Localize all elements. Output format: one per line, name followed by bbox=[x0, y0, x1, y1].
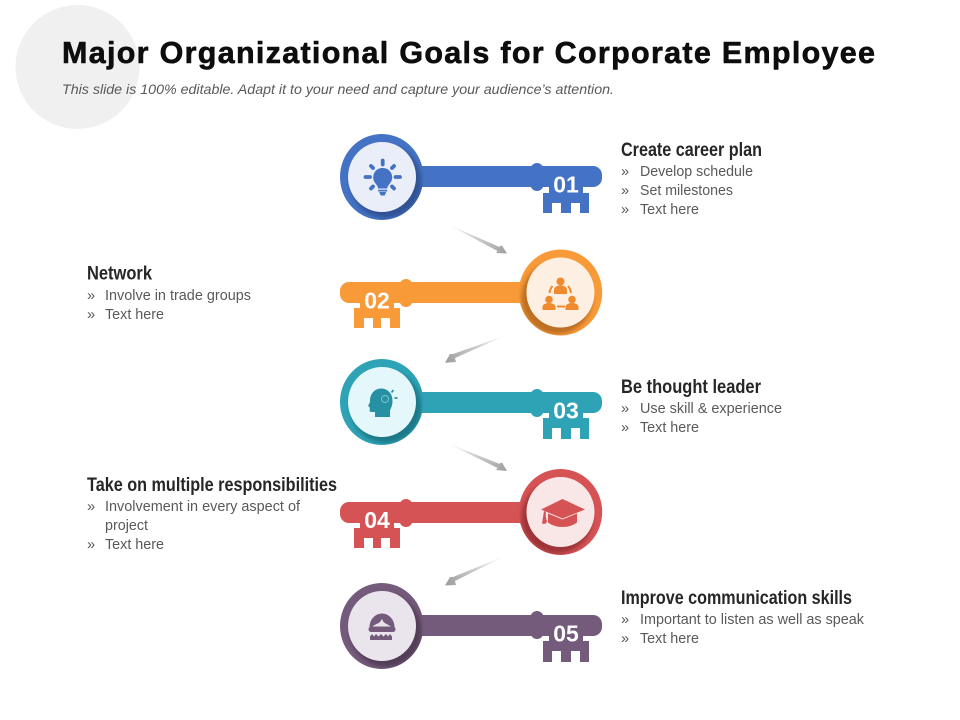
icon: people network bbox=[542, 278, 578, 310]
text block: be thought leader bbox=[621, 377, 782, 436]
icon: team under dome bbox=[368, 614, 396, 640]
title: Major Organizational Goals for Corporate Employee bbox=[62, 36, 875, 70]
icon: graduation cap bbox=[541, 499, 585, 527]
text block: create career plan: » bbox=[621, 202, 629, 218]
text block: improve communication skills: Improve communication skills bbox=[621, 588, 852, 609]
number 01: 01 bbox=[553, 172, 579, 198]
text block: network: Involve in trade groups bbox=[105, 288, 251, 304]
text block: be thought leader: » bbox=[621, 420, 629, 436]
subtitle: This slide is 100% editable. Adapt it to your need and capture your audience’s attention. bbox=[62, 81, 614, 97]
icon: head with idea bbox=[368, 388, 398, 417]
text block: take on multiple responsibilities: » bbox=[87, 499, 95, 515]
text block: take on multiple responsibilities: project bbox=[105, 518, 148, 534]
text block: be thought leader: » bbox=[621, 401, 629, 417]
number 02: 02 bbox=[364, 288, 390, 314]
text block: improve communication skills: Text here bbox=[640, 631, 699, 647]
text block: network: Text here bbox=[105, 307, 164, 323]
text block: network bbox=[87, 264, 251, 323]
arrow: 01 to 02 bbox=[447, 224, 507, 254]
text block: take on multiple responsibilities bbox=[87, 475, 337, 553]
text block: network: » bbox=[87, 288, 95, 304]
text block: create career plan: Set milestones bbox=[640, 183, 733, 199]
key 02: orange bbox=[340, 250, 602, 336]
text block: be thought leader: Be thought leader bbox=[621, 377, 762, 398]
text block: take on multiple responsibilities: Take on multiple responsibilities bbox=[87, 475, 337, 496]
icon: light bulb bbox=[366, 160, 400, 196]
text block: create career plan: Text here bbox=[640, 202, 699, 218]
number 03: 03 bbox=[553, 398, 579, 424]
arrow: 04 to 05 bbox=[445, 556, 505, 586]
text block: create career plan: Create career plan bbox=[621, 140, 762, 161]
arrow: 02 to 03 bbox=[445, 335, 507, 363]
key 03: teal bbox=[340, 359, 602, 445]
text block: improve communication skills: » bbox=[621, 612, 629, 628]
text block: improve communication skills: » bbox=[621, 631, 629, 647]
text block: create career plan bbox=[621, 140, 762, 218]
text block: take on multiple responsibilities: Involvement in every aspect of bbox=[105, 499, 301, 515]
key 01: blue bbox=[340, 134, 602, 220]
text block: create career plan: » bbox=[621, 183, 629, 199]
text block: create career plan: » bbox=[621, 164, 629, 180]
text block: take on multiple responsibilities: Text here bbox=[105, 537, 164, 553]
text block: be thought leader: Use skill & experience bbox=[640, 401, 782, 417]
number 05: 05 bbox=[553, 620, 579, 646]
text block: take on multiple responsibilities: » bbox=[87, 537, 95, 553]
arrow: 03 to 04 bbox=[447, 443, 507, 471]
key 05: purple bbox=[340, 583, 602, 669]
text block: be thought leader: Text here bbox=[640, 420, 699, 436]
text block: network: » bbox=[87, 307, 95, 323]
text block: create career plan: Develop schedule bbox=[640, 164, 753, 180]
number 04: 04 bbox=[364, 507, 390, 533]
key 04: red bbox=[340, 469, 602, 555]
text block: improve communication skills bbox=[621, 588, 865, 647]
text block: improve communication skills: Important to listen as well as speak bbox=[640, 612, 865, 628]
decorative grey circle behind title bbox=[16, 5, 140, 129]
text block: network: Network bbox=[87, 264, 152, 284]
